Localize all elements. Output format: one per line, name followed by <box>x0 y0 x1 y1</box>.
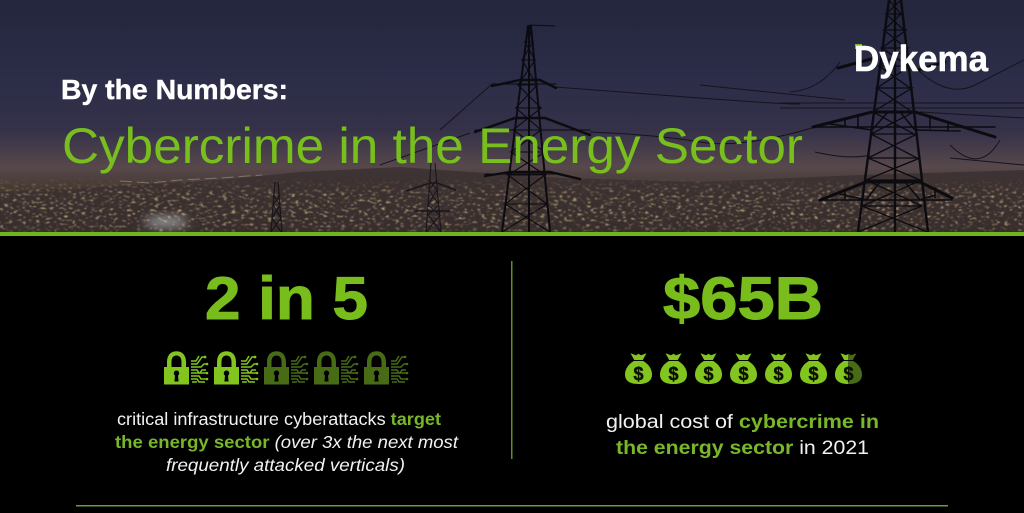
wires <box>380 60 1024 165</box>
title: Cybercrime in the Energy Sector <box>62 118 803 174</box>
distant hill <box>0 167 1024 232</box>
logo: Dykema: Dykema <box>854 38 989 79</box>
tower: middle <box>475 25 590 232</box>
icon row: money bags, six and a half lit: $ <box>738 364 749 384</box>
icon row: money bags, six and a half lit: $ <box>668 364 679 384</box>
tower: small left <box>271 182 282 232</box>
panel: 2 in 5 <box>115 265 459 475</box>
icon row: padlocks, two of five lit <box>164 351 408 384</box>
stat: 2 in 5: 2 in 5 <box>205 265 368 332</box>
icon row: money bags, six and a half lit: $ <box>633 364 644 384</box>
city lights <box>0 178 1024 232</box>
panel: $65B <box>606 265 879 459</box>
icon row: money bags, six and a half lit: $ <box>773 364 784 384</box>
description: global cost: global cost of cybercrime in <box>606 412 879 433</box>
description: infrastructure attacks: the energy sector (over 3x the next most <box>115 432 459 452</box>
icon row: money bags, six and a half lit: $ <box>808 364 819 384</box>
kicker heading: By the Numbers: <box>61 74 288 105</box>
tower: main right <box>813 0 995 232</box>
header photo: power lines over night city <box>0 0 1024 232</box>
tower: small centre <box>406 163 456 232</box>
stat: $65B: $65B <box>663 265 823 332</box>
description: infrastructure attacks <box>115 409 459 475</box>
header green rule <box>0 232 1024 236</box>
description: global cost <box>606 412 879 459</box>
description: global cost: the energy sector in 2021 <box>616 438 869 459</box>
icon row: money bags, six and a half lit: $ <box>703 364 714 384</box>
footer green rule <box>76 505 948 506</box>
panel divider <box>511 261 512 459</box>
icon row: money bags, six and a half lit <box>625 353 862 384</box>
icon row: money bags, six and a half lit: $ <box>843 364 854 384</box>
description: infrastructure attacks: frequently attacked verticals) <box>166 455 405 475</box>
description: infrastructure attacks: critical infrastructure cyberattacks target <box>117 409 441 429</box>
